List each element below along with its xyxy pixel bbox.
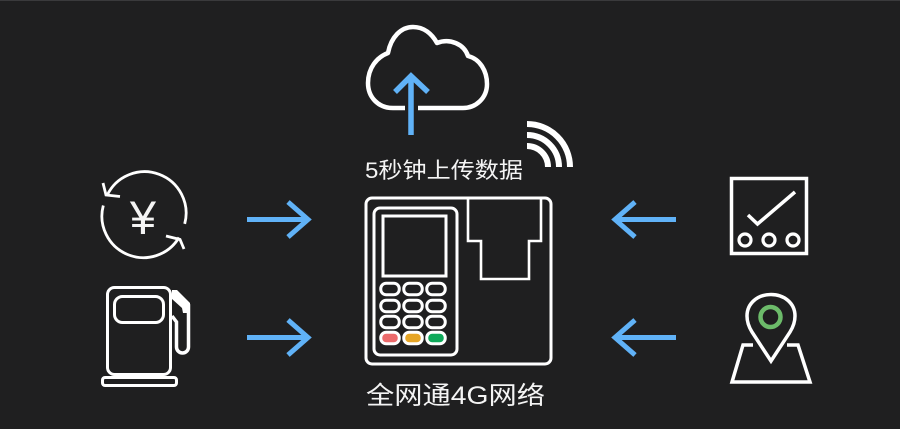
handheld terminal — [374, 208, 457, 355]
icon: wifi signal — [527, 124, 570, 167]
arrow: bottom right — [615, 320, 676, 355]
device outer body — [366, 198, 551, 364]
printer paper slot — [468, 198, 541, 279]
pump display — [114, 296, 164, 322]
icon: cloud upload — [368, 27, 487, 135]
heading: upload label: 5秒钟上传数据 — [365, 158, 523, 183]
icon: yen cycle — [102, 172, 186, 258]
keypad — [381, 283, 445, 344]
arrow: top right — [615, 202, 676, 237]
icon: map location pin — [732, 294, 810, 382]
arrow: bottom left — [247, 320, 308, 355]
yen sign: ¥ — [129, 191, 157, 244]
pump base — [102, 378, 176, 386]
heading: network label: 全网通4G网络 — [366, 382, 545, 410]
icon: fuel pump — [102, 288, 190, 386]
icon: checklist panel — [732, 178, 806, 254]
pump hose and nozzle — [172, 292, 188, 353]
pump body — [108, 288, 170, 374]
terminal screen — [383, 216, 446, 276]
arrow: top left — [247, 202, 308, 237]
icon: POS terminal — [366, 198, 551, 364]
